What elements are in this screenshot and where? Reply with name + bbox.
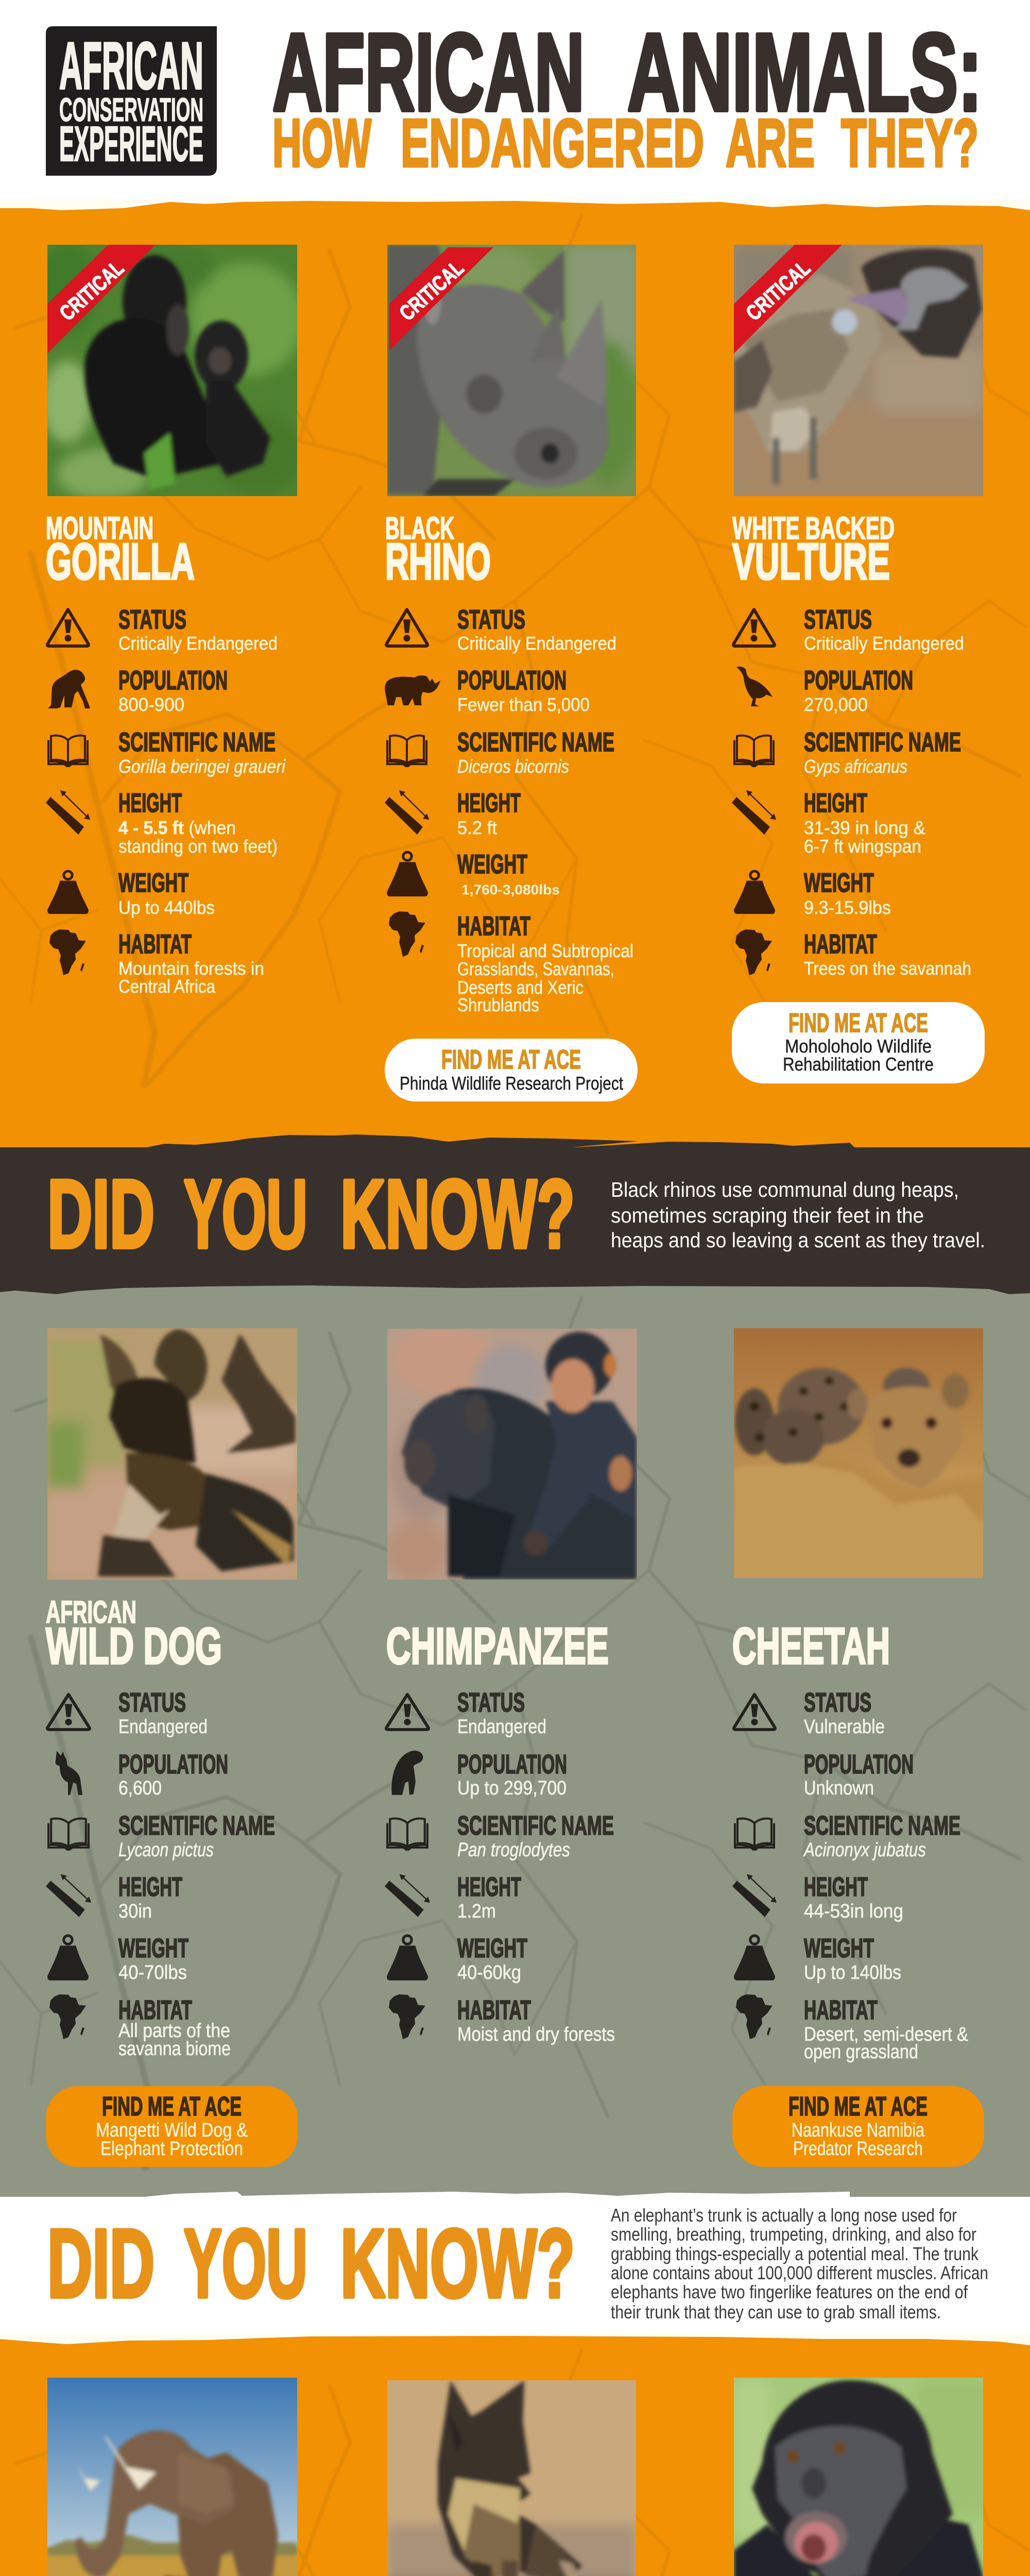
- ribbon: critical: CRITICAL: [394, 256, 468, 325]
- habitat row: HABITAT: [804, 929, 877, 959]
- habitat row: All parts of the: [118, 2020, 230, 2042]
- weight row: WEIGHT: [804, 868, 874, 898]
- population row: [48, 666, 228, 715]
- height row: 1.2m: [457, 1901, 496, 1922]
- button: find me at ace: Moholoholo Wildlife: [785, 1036, 932, 1057]
- panel: mountain gorilla: [36, 242, 304, 997]
- weight row: WEIGHT: [457, 850, 527, 879]
- weight row: [47, 868, 215, 918]
- heading: did you know: KNOW?: [340, 2209, 575, 2317]
- text block: elephant fact: [611, 2205, 988, 2323]
- status row: Critically Endangered: [457, 633, 616, 654]
- population row: [55, 1750, 228, 1799]
- page background: white header: [0, 0, 1030, 199]
- button: find me at ace: Rehabilitation Centre: [783, 1054, 934, 1075]
- height row: standing on two feet): [118, 836, 278, 857]
- habitat row: Central Africa: [118, 976, 216, 997]
- button: find me at ace: Phinda Wildlife Research Project: [400, 1073, 623, 1094]
- heading: did you know: [47, 1160, 575, 1268]
- habitat row: [735, 929, 971, 979]
- population row: 800-900: [118, 694, 184, 715]
- weight row: Up to 440lbs: [118, 897, 215, 918]
- population row: POPULATION: [804, 666, 913, 696]
- scientific name row: SCIENTIFIC NAME: [457, 727, 614, 757]
- heading: did you know: YOU: [184, 1160, 307, 1268]
- status row: STATUS: [804, 605, 872, 635]
- weight row: WEIGHT: [118, 1934, 188, 1963]
- habitat row: Tropical and Subtropical: [457, 940, 633, 961]
- habitat row: Moist and dry forests: [457, 2024, 615, 2045]
- name: CHIMPANZEE: [386, 1617, 609, 1674]
- height row: 30in: [118, 1901, 152, 1922]
- status row: [386, 605, 616, 654]
- photo: gorilla: [36, 242, 304, 500]
- status row: [734, 1688, 885, 1738]
- population row: [391, 1750, 567, 1799]
- population row: [804, 1750, 914, 1799]
- habitat row: Mountain forests in: [118, 958, 264, 979]
- height row: [385, 788, 521, 838]
- photo: wild dog: [47, 1328, 299, 1582]
- height row: [385, 1872, 521, 1922]
- population row: POPULATION: [118, 666, 228, 696]
- photo: elephant: [47, 2378, 297, 2576]
- weight row: WEIGHT: [457, 1934, 527, 1963]
- habitat row: Trees on the savannah: [804, 958, 971, 979]
- name: VULTURE: [732, 533, 890, 590]
- text block: rhino fact: heaps and so leaving a scent as they travel.: [611, 1228, 985, 1252]
- scientific name row: [48, 1811, 275, 1861]
- name: MOUNTAIN: [46, 511, 153, 546]
- height row: HEIGHT: [457, 788, 521, 818]
- text block: elephant fact: their trunk that they can use to grab small items.: [611, 2301, 941, 2323]
- ribbon: critical: [47, 245, 156, 353]
- button: find me at ace: Elephant Protection: [100, 2138, 243, 2160]
- heading: did you know: [47, 2209, 575, 2317]
- height row: HEIGHT: [118, 1872, 182, 1902]
- text block: rhino fact: sometimes scraping their feet in the: [611, 1204, 924, 1227]
- heading: did you know: DID: [47, 2209, 154, 2317]
- habitat row: [389, 911, 633, 1015]
- status row: Critically Endangered: [118, 633, 278, 654]
- text block: rhino fact: Black rhinos use communal dung heaps,: [611, 1178, 959, 1201]
- title: ENDANGERED: [401, 105, 704, 181]
- scientific name row: SCIENTIFIC NAME: [118, 1811, 275, 1841]
- status row: Vulnerable: [804, 1716, 885, 1738]
- weight row: WEIGHT: [118, 868, 188, 898]
- scientific name row: [735, 1811, 960, 1861]
- scientific name row: Lycaon pictus: [118, 1839, 214, 1861]
- habitat row: [49, 1994, 231, 2060]
- habitat row: [49, 929, 264, 997]
- photo: hyena: [387, 2380, 636, 2576]
- status row: STATUS: [804, 1688, 871, 1718]
- height row: [732, 1872, 903, 1922]
- logo: African Conservation Experience: [46, 26, 217, 176]
- panel background: grey section 2: [0, 1278, 1030, 2200]
- button: find me at ace: [46, 2086, 298, 2167]
- habitat row: HABITAT: [804, 1995, 878, 2025]
- panel: cheetah: [732, 1328, 984, 2167]
- weight row: Up to 140lbs: [804, 1962, 901, 1984]
- habitat row: [736, 1994, 968, 2063]
- population row: [736, 666, 913, 715]
- population row: 6,600: [118, 1777, 162, 1799]
- title: ARE: [726, 105, 815, 181]
- status row: STATUS: [118, 1688, 186, 1718]
- habitat row: open grassland: [804, 2041, 918, 2063]
- title: AFRICAN: [272, 11, 585, 134]
- scientific name row: [387, 727, 614, 777]
- name: AFRICAN: [46, 1595, 136, 1630]
- habitat row: [389, 1994, 615, 2045]
- scientific name row: Gyps africanus: [804, 756, 907, 777]
- weight row: [47, 1934, 188, 1984]
- scientific name row: Diceros bicornis: [457, 756, 569, 777]
- habitat row: HABITAT: [457, 911, 530, 941]
- status row: STATUS: [457, 1688, 525, 1718]
- ribbon: critical: [734, 245, 842, 353]
- height row: HEIGHT: [804, 788, 867, 818]
- habitat row: HABITAT: [118, 1995, 192, 2025]
- text block: elephant fact: An elephant’s trunk is actually a long nose used for: [611, 2205, 957, 2226]
- panel background: orange section 1: [0, 199, 1030, 1149]
- weight row: [734, 868, 891, 918]
- panel: did you know band 2: [0, 2192, 1030, 2345]
- text: EXPERIENCE: [59, 116, 203, 172]
- habitat row: HABITAT: [457, 1995, 531, 2025]
- photo: bonobo: [734, 2378, 984, 2576]
- panel: white backed vulture: [732, 245, 985, 1083]
- status row: Endangered: [118, 1716, 208, 1738]
- height row: [46, 1872, 182, 1922]
- name: CHEETAH: [732, 1617, 890, 1674]
- panel: bonobo: [732, 2378, 984, 2576]
- button: find me at ace: FIND ME AT ACE: [441, 1045, 581, 1075]
- height row: 6-7 ft wingspan: [804, 836, 921, 857]
- status row: [733, 605, 964, 654]
- button: find me at ace: FIND ME AT ACE: [788, 1008, 928, 1038]
- weight row: [734, 1934, 901, 1984]
- photo: chimpanzee: [386, 1324, 637, 1582]
- button: find me at ace: [385, 1039, 638, 1101]
- scientific name row: [387, 1811, 614, 1861]
- population row: POPULATION: [457, 1750, 567, 1780]
- button: find me at ace: [732, 1002, 985, 1083]
- name: [46, 1595, 222, 1674]
- panel: chimpanzee: [385, 1324, 637, 2045]
- status row: STATUS: [457, 605, 525, 635]
- habitat row: Desert, semi-desert &: [804, 2024, 968, 2045]
- height row: 4 - 5.5 ft (when: [118, 817, 236, 838]
- photo: vulture: [734, 245, 984, 500]
- title: HOW: [272, 105, 371, 181]
- population row: Up to 299,700: [457, 1777, 566, 1799]
- title: [272, 11, 982, 181]
- name: RHINO: [385, 533, 491, 590]
- status row: [47, 1688, 208, 1738]
- heading: did you know: DID: [47, 1160, 154, 1268]
- scientific name row: [734, 727, 961, 777]
- button: find me at ace: [732, 2086, 984, 2167]
- scientific name row: SCIENTIFIC NAME: [457, 1811, 614, 1841]
- heading: did you know: KNOW?: [340, 1160, 575, 1268]
- scientific name row: SCIENTIFIC NAME: [118, 727, 276, 757]
- status row: STATUS: [118, 605, 186, 635]
- height row: 44-53in long: [804, 1901, 903, 1922]
- name: [46, 511, 195, 590]
- habitat row: savanna biome: [118, 2038, 231, 2060]
- weight row: 1,760-3,080lbs: [461, 882, 560, 897]
- name: BLACK: [385, 511, 454, 546]
- height row: 31-39 in long &: [804, 817, 925, 838]
- height row: 5.2 ft: [457, 817, 497, 838]
- logo: African Conservation Experience: CONSERVATION: [59, 91, 203, 128]
- weight row: [387, 1934, 527, 1984]
- height row: [732, 788, 925, 857]
- population row: 270,000: [804, 694, 868, 715]
- panel: black rhino: [385, 245, 639, 1101]
- button: find me at ace: Mangetti Wild Dog &: [96, 2120, 248, 2141]
- scientific name row: Acinonyx jubatus: [803, 1839, 926, 1861]
- photo: cheetah: [734, 1328, 983, 1582]
- text block: rhino fact: [611, 1178, 985, 1252]
- heading: did you know: YOU: [184, 2209, 307, 2317]
- height row: HEIGHT: [804, 1872, 868, 1902]
- panel: did you know band 1: [0, 1134, 1030, 1294]
- name: WHITE BACKED: [732, 511, 895, 546]
- population row: POPULATION: [804, 1750, 914, 1780]
- weight row: 40-70lbs: [118, 1962, 187, 1984]
- height row: [46, 788, 278, 857]
- habitat row: Grasslands, Savannas,: [457, 958, 614, 979]
- scientific name row: [48, 727, 286, 777]
- name: GORILLA: [46, 533, 195, 590]
- habitat row: HABITAT: [118, 929, 192, 959]
- weight row: [387, 850, 560, 897]
- name: WILD DOG: [46, 1617, 222, 1674]
- name: [732, 511, 895, 590]
- button: find me at ace: FIND ME AT ACE: [102, 2092, 242, 2122]
- panel: african elephant: [46, 2378, 298, 2576]
- photo: rhino: [387, 245, 639, 496]
- population row: POPULATION: [457, 666, 566, 696]
- status row: Endangered: [457, 1716, 546, 1738]
- population row: Fewer than 5,000: [457, 694, 590, 715]
- habitat row: Shrublands: [457, 994, 539, 1015]
- population row: Unknown: [804, 1777, 874, 1799]
- weight row: 9.3-15.9lbs: [804, 897, 891, 918]
- height row: HEIGHT: [457, 1872, 521, 1902]
- logo: African Conservation Experience: AFRICAN: [59, 29, 203, 103]
- name: [385, 511, 491, 590]
- button: find me at ace: FIND ME AT ACE: [788, 2092, 928, 2122]
- population row: POPULATION: [118, 1750, 228, 1780]
- text block: elephant fact: elephants have two fingerlike features on the end of: [611, 2281, 968, 2302]
- ribbon: critical: [389, 247, 493, 350]
- ribbon: critical: CRITICAL: [741, 256, 815, 325]
- scientific name row: Pan troglodytes: [457, 1839, 570, 1861]
- scientific name row: Gorilla beringei graueri: [118, 756, 286, 777]
- panel: african wild dog: [46, 1328, 299, 2167]
- status row: [47, 605, 278, 654]
- weight row: 40-60kg: [457, 1962, 521, 1984]
- button: find me at ace: Naankuse Namibia: [792, 2120, 925, 2141]
- panel background: orange section 3: [0, 2334, 1030, 2576]
- status row: Critically Endangered: [804, 633, 964, 654]
- weight row: WEIGHT: [804, 1934, 874, 1963]
- population row: [385, 666, 590, 715]
- panel: brown hyena: [385, 2380, 638, 2576]
- status row: [386, 1688, 546, 1738]
- habitat row: Deserts and Xeric: [457, 977, 583, 998]
- button: find me at ace: Predator Research: [793, 2138, 923, 2160]
- height row: HEIGHT: [118, 788, 182, 818]
- ribbon: critical: CRITICAL: [55, 256, 128, 325]
